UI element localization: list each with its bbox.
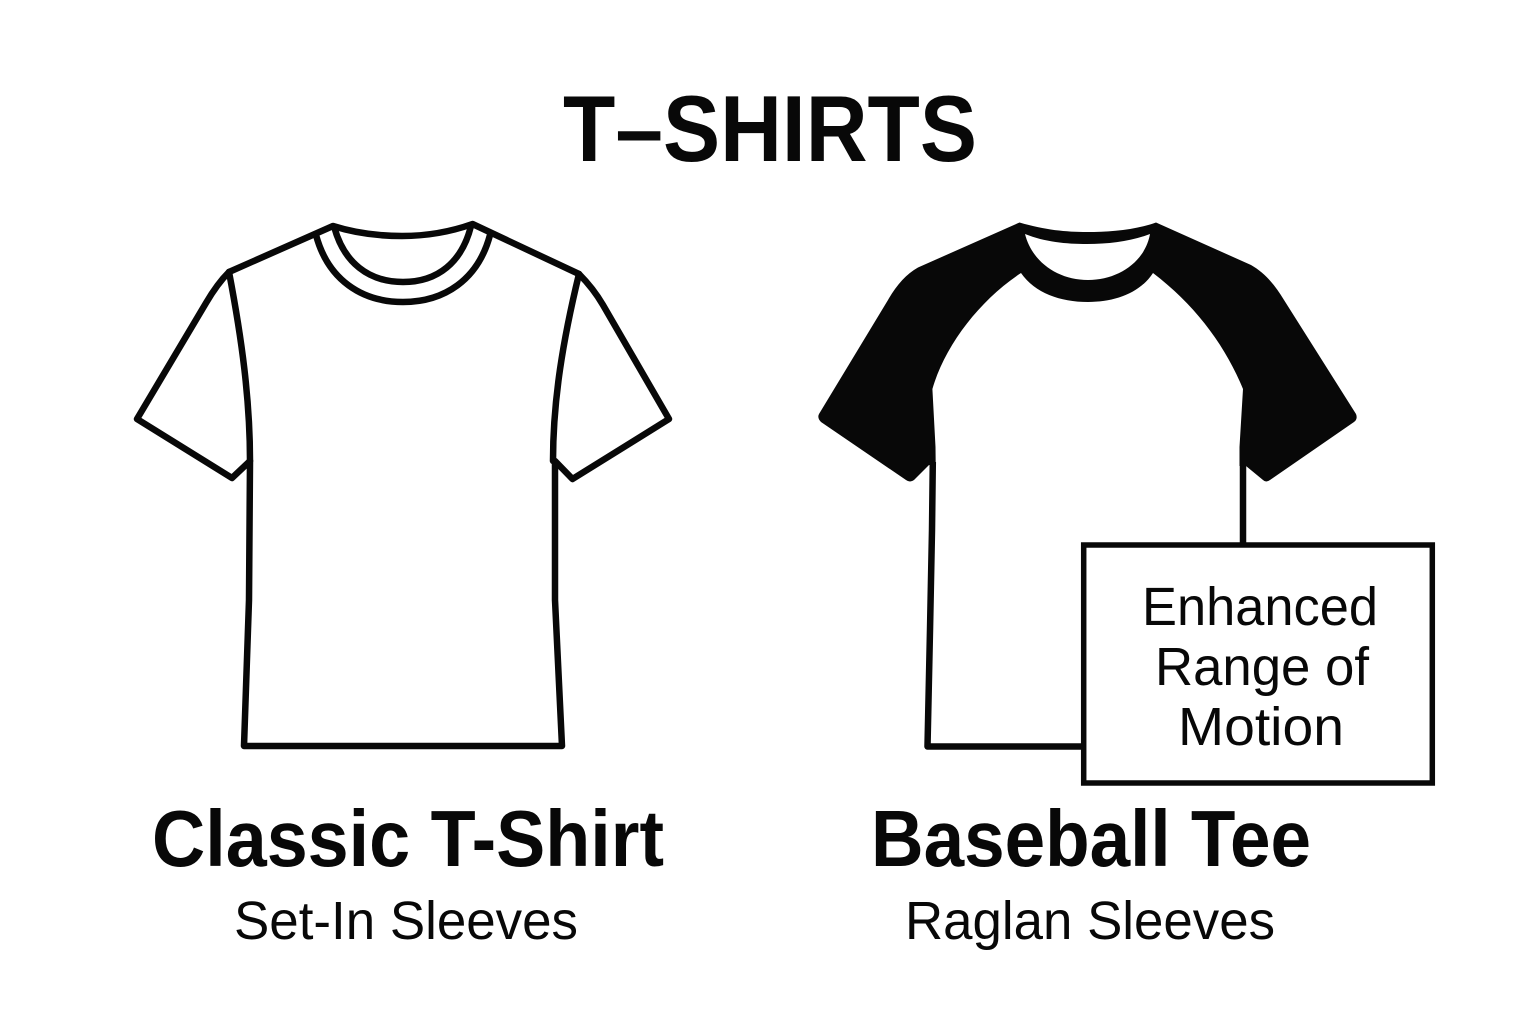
baseball tee illustration	[818, 222, 1357, 746]
outer collar line	[316, 235, 490, 302]
black raglan sleeves and collar	[818, 222, 1357, 482]
left armhole seam	[229, 272, 250, 461]
heading: baseball tee: Baseball Tee	[871, 794, 1311, 883]
subheading: raglan sleeves: Raglan Sleeves	[905, 891, 1275, 951]
callout: enhanced range of motion	[1084, 545, 1432, 783]
classic t-shirt illustration	[137, 224, 669, 746]
subheading: set-in sleeves: Set-In Sleeves	[234, 891, 578, 951]
white shirt body	[932, 273, 1243, 490]
body side and hem lines	[928, 462, 1243, 746]
heading: classic t-shirt: Classic T-Shirt	[152, 794, 664, 883]
callout: enhanced range of motion: Enhanced	[1142, 577, 1378, 637]
inner collar line	[334, 226, 471, 282]
neck opening	[1025, 234, 1150, 280]
callout: enhanced range of motion: Range of	[1155, 637, 1370, 697]
classic shirt outline	[137, 224, 669, 746]
right armhole seam	[553, 274, 579, 461]
title: T–SHIRTS	[563, 76, 977, 181]
callout: enhanced range of motion: Motion	[1178, 697, 1344, 757]
